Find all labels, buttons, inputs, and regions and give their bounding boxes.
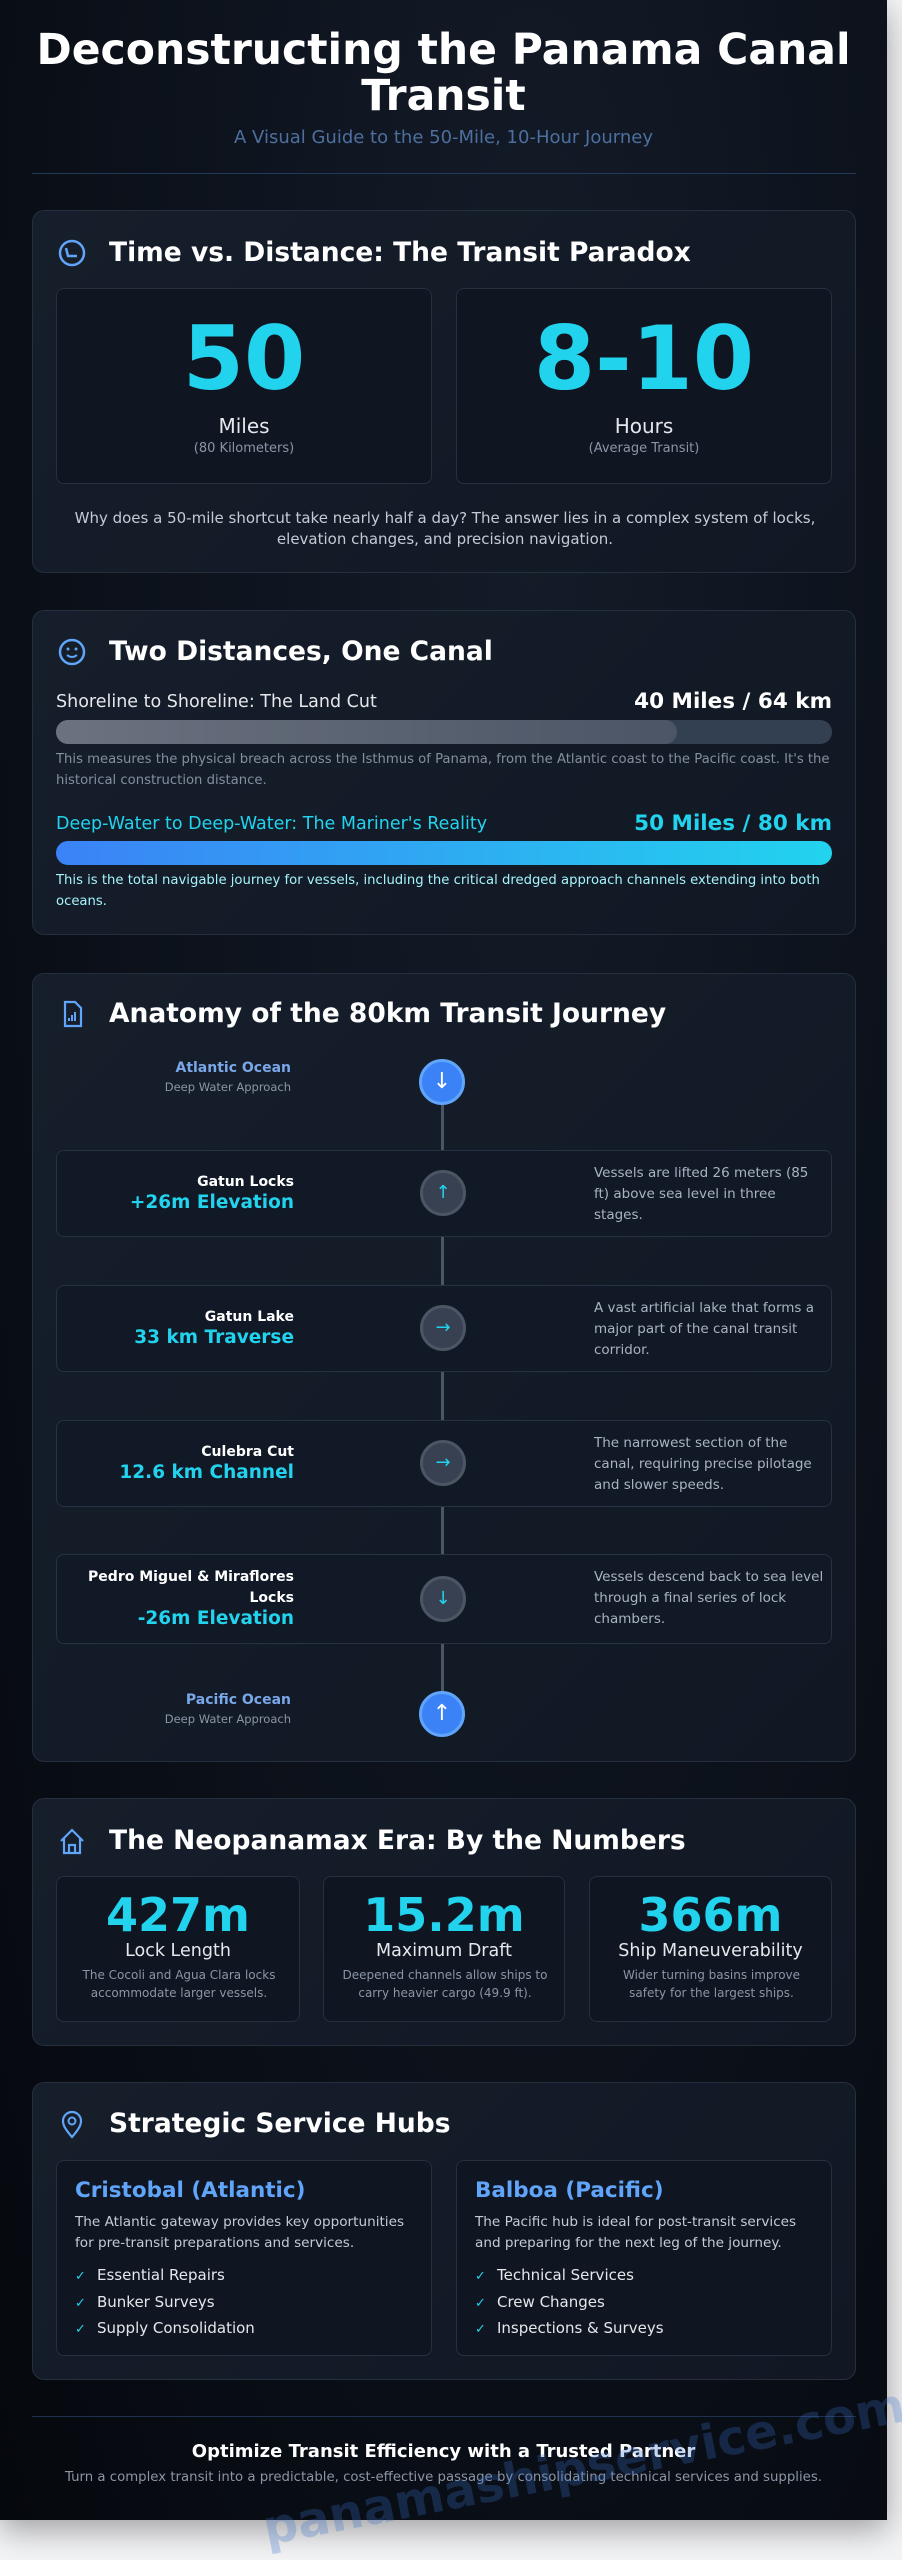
panel: neopanamax [32,1798,856,2046]
step: atlantic ocean: ↓ [433,1069,451,1094]
step: culebra cut [56,1420,832,1507]
footer text: Turn a complex transit into a predictable, cost-effective passage by consolidating technical services and supplies. [65,2470,822,2485]
land cut row [56,689,832,788]
hub: cristobal [56,2160,432,2356]
hub: balboa: Technical Services [497,2266,634,2284]
stat: 50 miles: (80 Kilometers) [194,441,294,456]
icon: document chart [64,1000,82,1028]
deep water row: This is the total navigable journey for vessels, including the critical dredged approach channels extending into both oceans. [56,873,820,909]
heading: Time vs. Distance: The Transit Paradox [109,237,691,268]
deep water row [56,811,832,909]
bar: land cut [56,720,832,744]
heading: Anatomy of the 80km Transit Journey [109,998,666,1029]
hub: cristobal: ✓ [75,2322,86,2337]
heading: Two Distances, One Canal [109,636,493,667]
stat: max draft: Deepened channels allow ships to carry heavier cargo (49.9 ft). [343,1968,547,2000]
hub: balboa: ✓ [475,2322,486,2337]
hub: cristobal: Essential Repairs [97,2266,225,2284]
step: atlantic ocean [165,1059,465,1105]
step: gatun lake: A vast artificial lake that forms a major part of the canal transit corridor. [594,1300,814,1358]
step: pedro miguel & miraflores [56,1554,832,1644]
stat: maneuverability: Ship Maneuverability [618,1941,803,1961]
step: gatun lake: → [435,1317,451,1338]
icon: house [60,1828,84,1854]
land cut row: Shoreline to Shoreline: The Land Cut [56,692,377,712]
footer title: Optimize Transit Efficiency with a Trusted Partner [192,2441,695,2462]
icon: map pin [62,2110,82,2138]
step: pacific ocean [165,1691,465,1737]
stat: 50 miles [56,288,432,484]
stat: lock length: 427m [106,1888,250,1942]
step: gatun locks [56,1150,832,1237]
step: gatun locks: Vessels are lifted 26 meters (85 ft) above sea level in three stages. [594,1165,808,1223]
hub: balboa [456,2160,832,2356]
stat: 8-10 hours: Hours [615,414,673,438]
hub: cristobal: The Atlantic gateway provides key opportunities for pre-transit preparations and services. [75,2214,404,2251]
title [36,26,851,121]
hub: balboa: The Pacific hub is ideal for post-transit services and preparing for the next leg of the journey. [475,2214,796,2251]
watermark: panamashipservice.com [258,2377,902,2557]
step: gatun lake: 33 km Traverse [134,1327,294,1348]
title: Deconstructing the Panama Canal [36,26,851,75]
stat: maneuverability: Wider turning basins improve safety for the largest ships. [623,1968,800,2000]
stat: 8-10 hours: 8-10 [534,307,754,410]
panel: anatomy [32,973,856,1762]
hub: cristobal: ✓ [75,2296,86,2310]
step: pedro miguel & miraflores: ↓ [435,1588,451,1609]
step: culebra cut: → [435,1452,451,1473]
stat: 8-10 hours: (Average Transit) [589,441,699,456]
step: gatun lake [56,1285,832,1372]
bar: deep water [56,841,832,865]
stat: lock length [56,1876,300,2022]
stat: 8-10 hours [456,288,832,484]
hub: cristobal: Bunker Surveys [97,2292,215,2310]
deep water row: 50 Miles / 80 km [634,811,832,836]
stat: maneuverability: 366m [639,1888,782,1942]
paragraph: Why does a 50-mile shortcut take nearly half a day? The answer lies in a complex system of locks, elevation changes, and precision navigation. [75,509,815,548]
title: Transit [361,72,526,121]
stat: lock length: The Cocoli and Agua Clara locks accommodate larger vessels. [83,1968,275,2000]
hub: balboa: Inspections & Surveys [497,2319,664,2337]
step: culebra cut: 12.6 km Channel [119,1462,294,1483]
step: atlantic ocean: Deep Water Approach [165,1080,291,1094]
stat: 50 miles: Miles [218,414,270,438]
stat: 50 miles: 50 [183,307,305,410]
step: pedro miguel & miraflores: Vessels descend back to sea level through a final series of lock chambers. [594,1569,823,1627]
subtitle: A Visual Guide to the 50-Mile, 10-Hour Journey [234,127,653,148]
step: gatun locks: Gatun Locks [197,1174,294,1190]
hub: balboa: ✓ [475,2296,486,2310]
hub: balboa: ✓ [475,2269,486,2284]
heading: The Neopanamax Era: By the Numbers [109,1825,686,1856]
hub: cristobal: Cristobal (Atlantic) [75,2178,306,2203]
step: pacific ocean: Deep Water Approach [165,1712,291,1726]
land cut row: 40 Miles / 64 km [634,689,832,714]
hub: cristobal: Supply Consolidation [97,2319,255,2337]
icon: smile [58,638,86,666]
step: atlantic ocean: Atlantic Ocean [175,1060,291,1076]
step: pedro miguel & miraflores: -26m Elevation [138,1608,294,1629]
hub: balboa: Balboa (Pacific) [475,2178,664,2203]
step: gatun lake: Gatun Lake [205,1309,294,1325]
panel: service hubs [32,2082,856,2380]
stat: maneuverability [589,1876,832,2022]
hub: balboa: Crew Changes [497,2292,605,2310]
land cut row: This measures the physical breach across the Isthmus of Panama, from the Atlantic coast to the Pacific coast. It's the historical construction distance. [56,752,830,788]
heading: Strategic Service Hubs [109,2108,451,2139]
stat: lock length: Lock Length [125,1941,231,1961]
icon: clock [58,240,86,266]
step: pedro miguel & miraflores: Pedro Miguel & Miraflores Locks [88,1569,294,1606]
deep water row: Deep-Water to Deep-Water: The Mariner's Reality [56,814,487,834]
panel: time vs distance [32,210,856,573]
step: gatun locks: +26m Elevation [130,1192,294,1213]
stat: max draft: 15.2m [363,1888,525,1942]
stat: max draft: Maximum Draft [376,1941,512,1961]
step: pacific ocean: Pacific Ocean [186,1692,291,1708]
step: culebra cut: The narrowest section of the canal, requiring precise pilotage and slower speeds. [594,1435,812,1493]
panel: two distances [32,610,856,935]
stat: max draft [323,1876,565,2022]
step: gatun locks: ↑ [435,1182,451,1203]
step: culebra cut: Culebra Cut [201,1444,294,1460]
hub: cristobal: ✓ [75,2269,86,2284]
step: pacific ocean: ↑ [433,1701,451,1726]
